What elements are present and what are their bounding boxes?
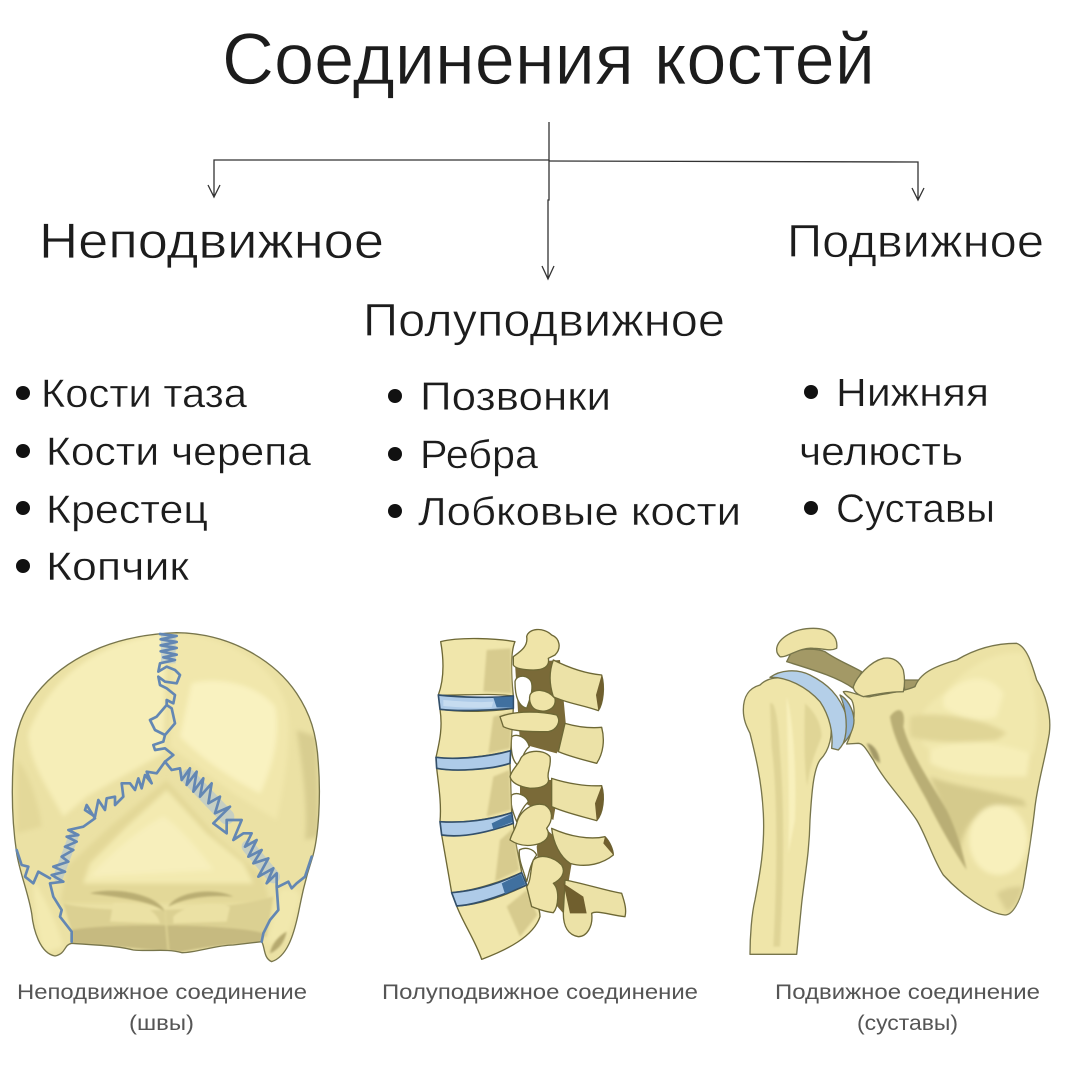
dark posterior shadows (515, 660, 573, 913)
arrow: to immovable (208, 122, 549, 197)
body shading (483, 648, 537, 937)
disc highlights and shadows (443, 697, 525, 894)
labrum (840, 695, 854, 743)
suture lobes tint (58, 635, 273, 877)
illustration: spine (436, 630, 626, 959)
caption: movable: Подвижное соединение (775, 981, 1040, 1004)
coracoid (853, 658, 905, 697)
arrow tree (208, 122, 924, 279)
skull outline (12, 633, 319, 962)
list: immovable (16, 372, 312, 589)
list: semi-movable (388, 375, 741, 534)
list: semi-movable: Ребра (420, 433, 539, 477)
humerus highlights (770, 697, 822, 947)
scapula shading (867, 653, 1037, 912)
title: Соединения костей (222, 20, 875, 100)
spinous processes (550, 660, 626, 937)
heading: semi-movable: Полуподвижное (363, 294, 725, 346)
heading: immovable: Неподвижное (39, 213, 384, 269)
acromion (777, 628, 837, 657)
sutures (17, 634, 312, 942)
caption: sutures: (швы) (129, 1012, 194, 1035)
heading: movable: Подвижное (787, 215, 1044, 267)
glenoid cartilage (770, 671, 848, 750)
articular processes (500, 630, 563, 913)
shaded ends of processes (563, 675, 613, 913)
list: immovable: Крестец (46, 488, 208, 532)
skull shading (17, 633, 319, 953)
list: movable: Суставы (836, 487, 995, 531)
illustration: shoulder joint (743, 628, 1050, 954)
list: immovable: Кости черепа (46, 430, 312, 474)
scapula (843, 643, 1050, 915)
clavicle shadow strut (787, 649, 920, 692)
humerus (743, 678, 831, 954)
intervertebral discs (436, 695, 527, 906)
list: immovable: Копчик (46, 545, 190, 589)
list: movable: челюсть (799, 430, 963, 474)
arrow: to semi-movable (542, 160, 554, 279)
vertebral bodies (436, 639, 540, 959)
caption: immovable: Неподвижное соединение (17, 981, 307, 1004)
list: movable (799, 371, 995, 531)
caption: joints: (суставы) (857, 1012, 958, 1035)
skull base (12, 633, 319, 962)
spinal openings (511, 676, 537, 882)
list: semi-movable: Лобковые кости (418, 490, 741, 534)
illustration: skull with sutures (12, 633, 319, 962)
arrow: to movable (549, 161, 924, 200)
list: semi-movable: Позвонки (420, 375, 611, 419)
caption: semi-movable: Полуподвижное соединение (382, 981, 698, 1004)
list: immovable: Кости таза (41, 372, 248, 416)
list: movable: Нижняя (836, 371, 989, 415)
